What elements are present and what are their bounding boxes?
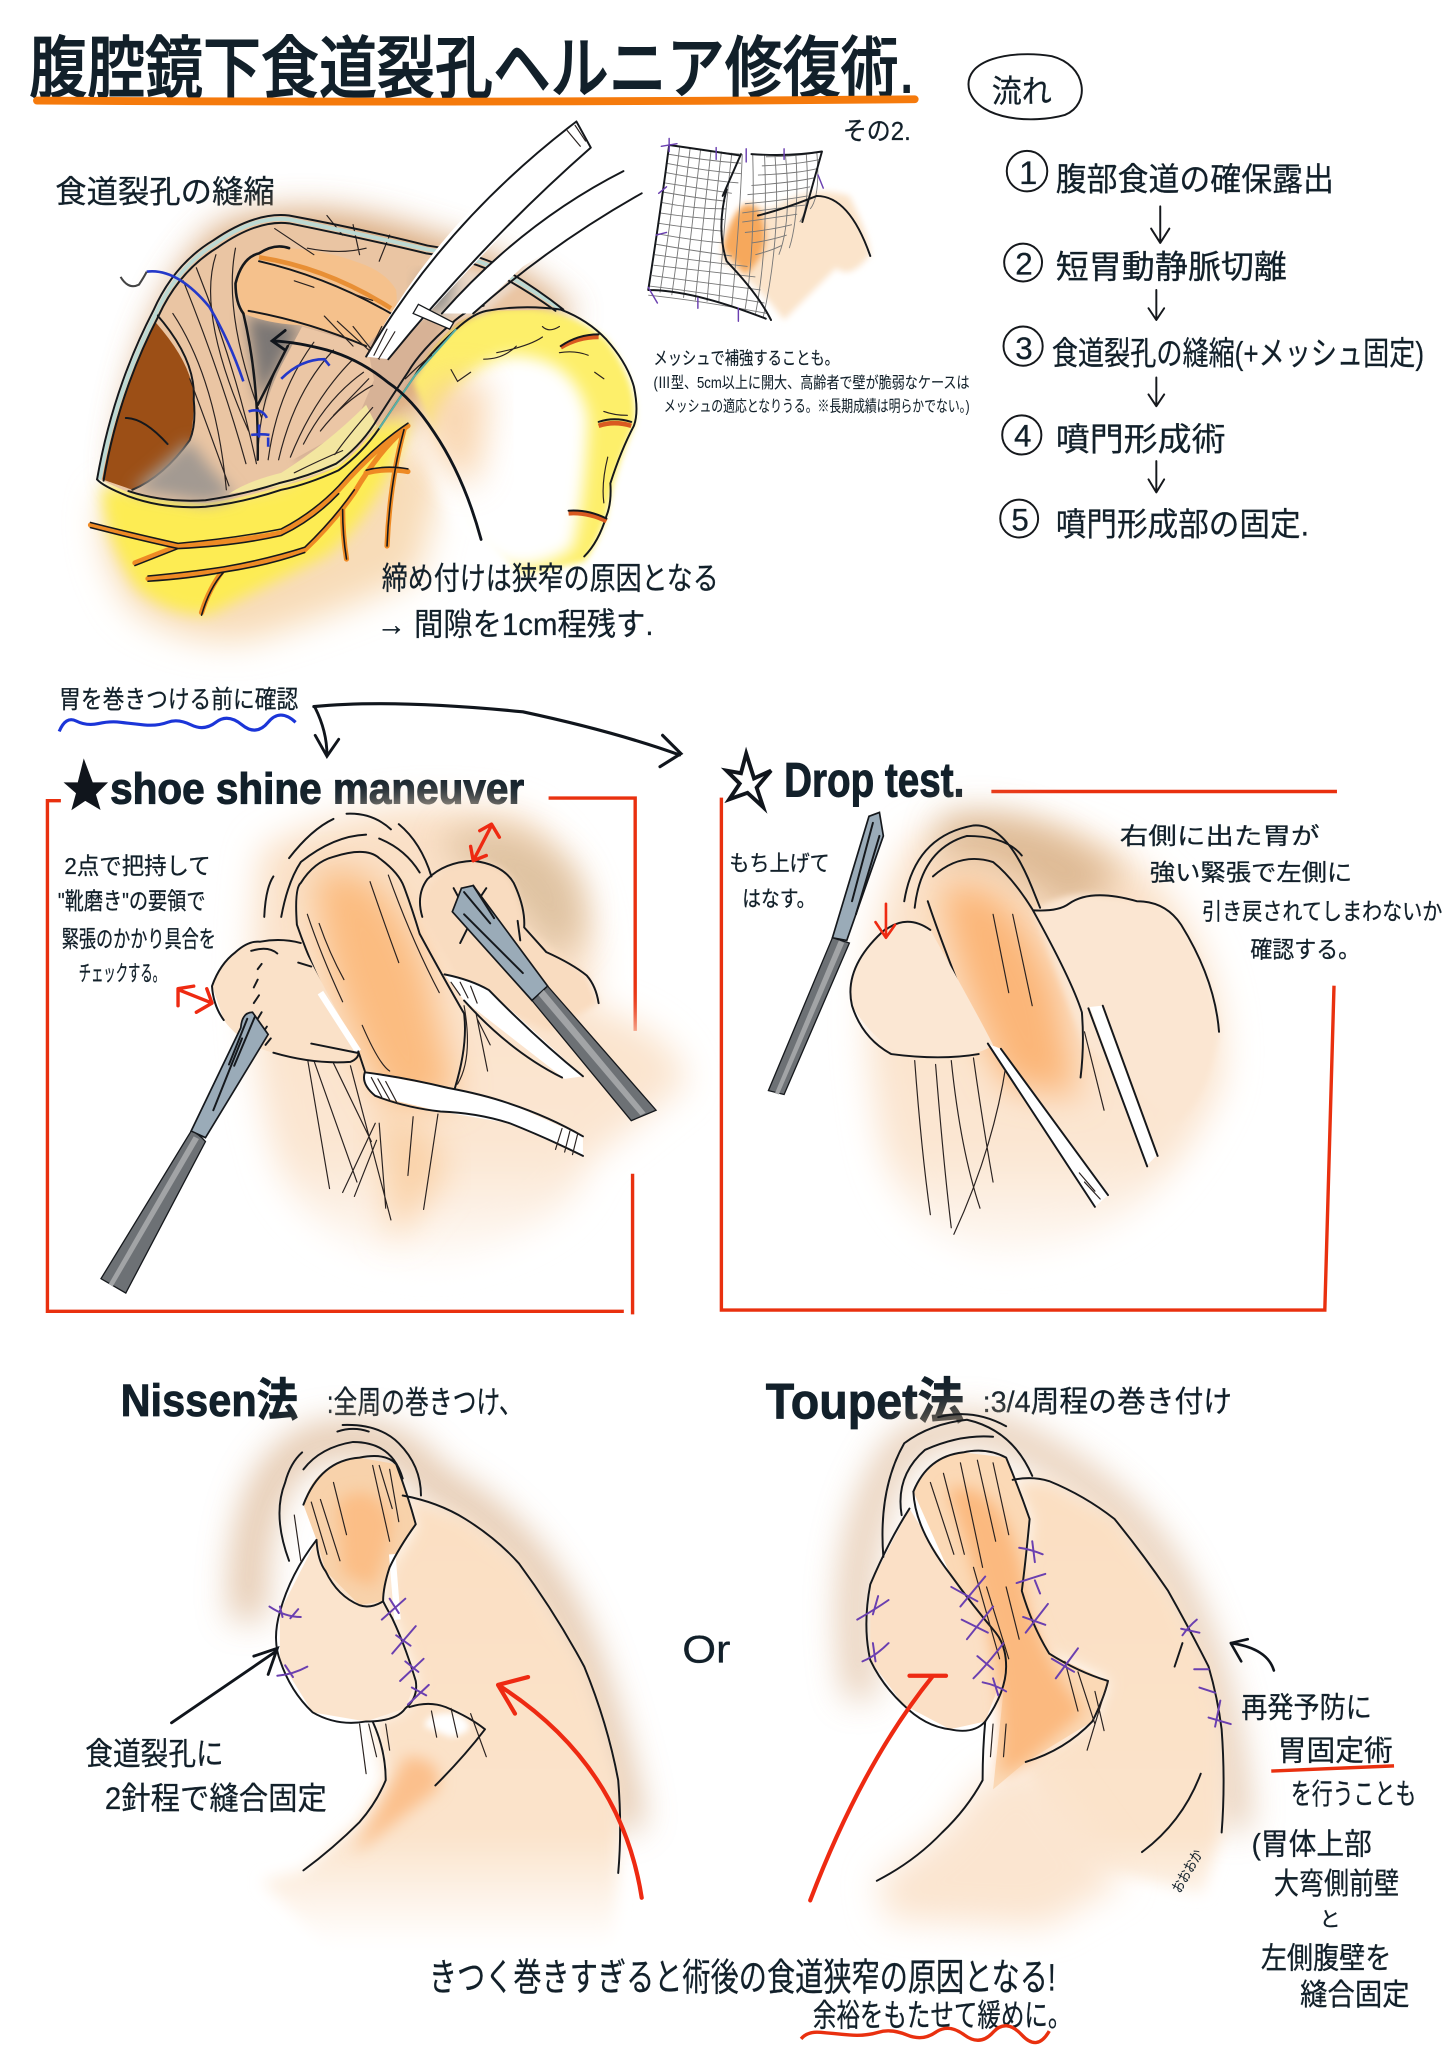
note: stenosis warning <box>429 1958 1071 2043</box>
instruction text: もち上げて <box>729 851 830 876</box>
panel frame <box>721 792 1335 1310</box>
note: tightening warning: 締め付けは狭窄の原因となる <box>382 561 719 596</box>
instruction text <box>58 853 216 986</box>
step 5 <box>1000 500 1309 543</box>
instruction text: チェックする。 <box>79 961 165 986</box>
heading: Toupet <box>766 1373 1232 1429</box>
flow steps <box>1000 151 1424 543</box>
title: 腹腔鏡下食道裂孔ヘルニア修復術. <box>29 33 915 108</box>
sutures <box>857 1541 1231 1727</box>
arrow: to drop test <box>314 704 681 767</box>
part number: その2. <box>843 116 911 146</box>
illustration: Nissen fundoplication <box>248 1425 627 1946</box>
instruction text: 緊張のかかり具合を <box>62 926 216 952</box>
instruction text: "靴磨き"の要領で <box>58 888 205 914</box>
heading: Toupet: :3/4周程の巻き付け <box>983 1386 1232 1419</box>
left gastric fold <box>212 940 358 1062</box>
gastric vessels <box>91 426 408 613</box>
step 1: 1 <box>1019 154 1037 191</box>
heading: hiatus closure: 食道裂孔の縫縮 <box>55 174 275 209</box>
arrow 2 <box>1148 290 1164 320</box>
fat outline <box>561 310 636 556</box>
esophagus <box>904 825 1083 1078</box>
right crus <box>255 327 374 460</box>
arrow 4 <box>1148 461 1164 492</box>
halo <box>248 1438 627 1829</box>
note: gastropexy: (胃体上部 <box>1252 1829 1372 1862</box>
brown halo <box>118 210 575 496</box>
forceps: right <box>452 886 656 1121</box>
airbrush background <box>868 824 1224 1254</box>
arrows: wrap too tight <box>498 1676 946 1900</box>
arrow: hiatus suture pointer <box>172 1648 277 1723</box>
panel: drop test <box>721 792 1442 1310</box>
caption: mesh note: メッシュで補強することも。 <box>653 347 839 368</box>
note: stenosis warning: きつく巻きすぎると術後の食道狭窄の原因となる! <box>429 1958 1056 2000</box>
note: gastropexy: 胃固定術 <box>1278 1736 1393 1768</box>
heading: Nissen: :全周の巻きつけ、 <box>327 1385 523 1420</box>
upper band <box>444 974 583 1079</box>
dropped fold <box>850 922 993 1057</box>
note: gastropexy: と <box>1320 1909 1340 1932</box>
note: gastropexy: 左側腹壁を <box>1261 1942 1391 1975</box>
step 4 <box>1002 415 1226 458</box>
step 4: 噴門形成術 <box>1056 421 1226 458</box>
step 4: 4 <box>1014 419 1031 454</box>
flow heading <box>968 54 1082 119</box>
label: check before wrap: 胃を巻きつける前に確認 <box>59 686 298 714</box>
note: hiatus suture <box>85 1737 327 1816</box>
heading: shoe shine maneuver: shoe shine maneuver <box>110 765 524 813</box>
caption: mesh note: メッシュの適応となりうる。※長期成績は明らかでない。) <box>664 397 970 415</box>
heading: Toupet: Toupet法 <box>766 1373 964 1429</box>
note: tightening warning: → 間隙を1cm程残す. <box>377 607 653 642</box>
cream fat <box>229 405 377 494</box>
explanation text <box>1120 823 1442 962</box>
caption: mesh note <box>653 347 970 415</box>
heading: drop test <box>727 754 964 808</box>
narrowing arrow <box>272 330 481 539</box>
big stomach <box>1034 894 1219 1123</box>
flow heading: 流れ <box>992 74 1052 109</box>
liver <box>102 323 194 490</box>
halo <box>855 1428 1235 1829</box>
outlines <box>403 1496 620 1873</box>
signature: おおおか <box>1169 1847 1207 1896</box>
forceps <box>768 812 883 1095</box>
red motion arrows <box>178 824 499 1012</box>
arrow 3 <box>1148 377 1164 406</box>
esophagus <box>296 852 465 1088</box>
step 2: 2 <box>1015 246 1033 281</box>
panel: shoe shine maneuver <box>47 798 686 1313</box>
left strap <box>988 1044 1108 1207</box>
heading: Nissen: Nissen法 <box>121 1375 298 1426</box>
illustration: mesh reinforcement <box>648 138 870 321</box>
explanation text: 右側に出た胃が <box>1120 823 1320 849</box>
heading: drop test: Drop test. <box>784 754 964 808</box>
sutures <box>269 1599 429 1704</box>
tape <box>366 121 591 359</box>
forceps: left <box>101 1012 268 1293</box>
right strap <box>1090 1006 1156 1165</box>
label: or: Or <box>682 1629 731 1672</box>
step 1 <box>1007 151 1334 198</box>
arrow 1 <box>1151 206 1169 243</box>
note: gastropexy <box>1241 1693 1416 2012</box>
step 5: 噴門形成部の固定. <box>1056 506 1309 543</box>
esophagus <box>236 246 397 346</box>
lower fat <box>102 418 412 614</box>
explanation text: 強い緊張で左側に <box>1150 859 1352 885</box>
step 3: 3 <box>1015 331 1033 366</box>
field rim <box>100 219 561 479</box>
instruction text <box>729 851 830 911</box>
instruction text: はなす。 <box>742 886 815 911</box>
note: gastropexy: 縫合固定 <box>1300 1979 1410 2012</box>
airbrush background <box>252 805 686 1260</box>
red drop arrow <box>876 904 895 938</box>
note: gastropexy: 大弯側前壁 <box>1274 1868 1399 1901</box>
note: gastropexy: 再発予防に <box>1241 1693 1372 1725</box>
lower band <box>364 1072 583 1156</box>
note: tightening warning <box>377 561 719 642</box>
arrow: to shoe shine <box>315 708 339 756</box>
illustration: Toupet fundoplication <box>855 1414 1235 1927</box>
caption: mesh note: (Ⅲ型、5cm以上に開大、高齢者で壁が脆弱なケースは <box>653 374 970 392</box>
panel frame <box>47 798 635 1313</box>
field of view <box>100 219 561 503</box>
illustration: hiatus closure surgical field <box>91 121 642 641</box>
blue sutures <box>147 271 330 447</box>
note: hiatus suture: 食道裂孔に <box>85 1737 224 1772</box>
instruction text: 2点で把持して <box>64 853 211 879</box>
explanation text: 確認する。 <box>1250 936 1360 962</box>
note: stenosis warning: 余裕をもたせて緩めに。 <box>813 1998 1071 2033</box>
step 3 <box>1004 327 1424 371</box>
note: hiatus suture: 2針程で縫合固定 <box>105 1781 327 1816</box>
step 5: 5 <box>1011 502 1029 537</box>
gray recess <box>132 440 236 503</box>
right recess <box>294 313 451 464</box>
right gastric fold <box>422 861 599 1032</box>
step 2: 短胃動静脈切離 <box>1056 248 1287 285</box>
arrow: gastropexy pointer <box>1231 1639 1274 1671</box>
right fat ring <box>412 308 635 575</box>
heading: Nissen <box>121 1375 523 1426</box>
outlines <box>1013 1478 1224 1832</box>
fibers <box>173 216 390 490</box>
step 1: 腹部食道の確保露出 <box>1056 161 1334 198</box>
label: check before wrap <box>59 686 298 731</box>
